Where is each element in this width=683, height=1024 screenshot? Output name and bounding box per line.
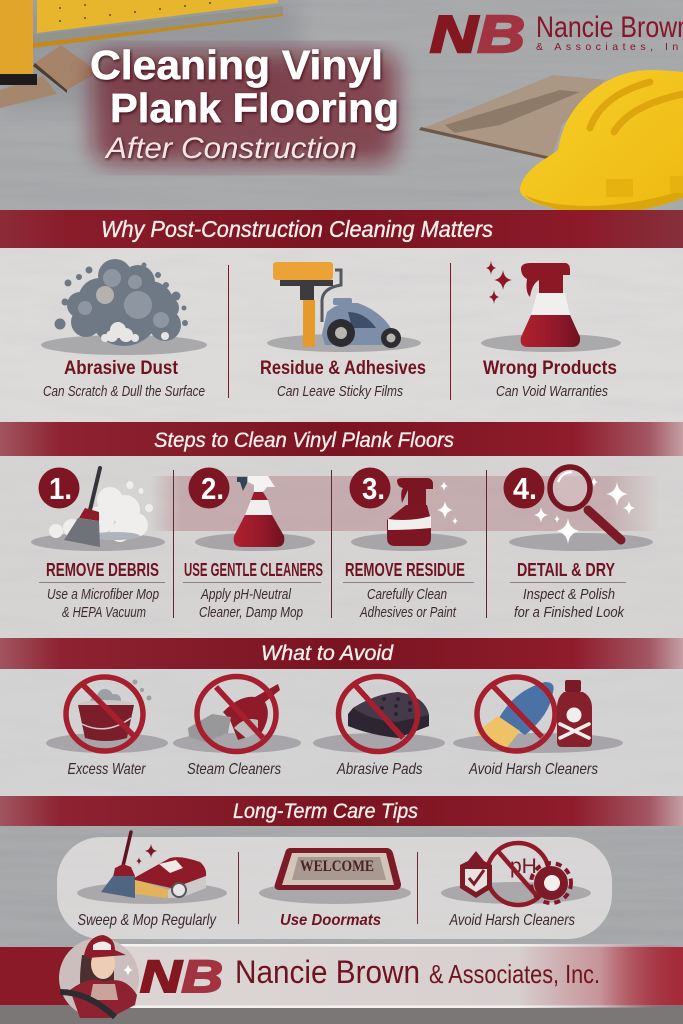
step 3: REMOVE RESIDUE [345,560,465,580]
rounded pill panel [57,837,612,939]
tip: avoid harsh cleaners: pH [510,855,537,878]
section heading band [0,210,683,248]
tip: avoid harsh cleaners [441,843,591,929]
section heading band [0,638,683,669]
icon: spray bottle [234,476,284,547]
panel background [0,248,683,422]
panel: steps [0,422,683,638]
footer pill [90,944,683,1008]
number badge 1 [38,468,80,508]
divider [228,265,229,398]
number badge 4: 4. [513,471,537,506]
avoid: harsh cleaners [453,677,623,778]
top logo [430,6,683,64]
footer logo mark NB: NB [140,951,223,1002]
item: residue and adhesives: Can Leave Sticky Films [277,383,403,400]
footer band [0,947,683,1005]
panel: long-term care tips [0,796,683,939]
label: Abrasive Pads [336,761,422,778]
item: abrasive dust [43,358,205,400]
panel: why it matters [0,210,683,422]
dividers [238,852,418,924]
title line 1: Cleaning Vinyl [90,42,383,88]
section heading band [0,796,683,826]
number badge 3: 3. [362,471,385,506]
title line 2: Plank Flooring [110,85,399,131]
icon: broom and dust [49,468,153,547]
number badge 1: 1. [49,471,72,506]
item: residue and adhesives: Residue & Adhesives [260,358,426,379]
dividers [173,470,487,618]
step 2 [183,468,323,621]
icon: spray bottle [481,261,621,352]
item: abrasive dust: Abrasive Dust [64,358,179,379]
label: Avoid Harsh Cleaners [468,761,598,778]
step 3 [343,468,474,621]
icon: abrasive dust [41,259,207,355]
footer company suffix: & Associates, Inc. [429,959,600,989]
title block [90,42,399,165]
item: abrasive dust: Can Scratch & Dull the Surface [43,383,205,400]
label: Excess Water [68,761,146,778]
number badge 3 [350,468,390,508]
step 2: Apply pH-Neutral [200,586,292,603]
step 4: Inspect & Polish [523,586,615,603]
title line 3: After Construction [104,132,357,165]
step 1 [31,468,165,621]
number badge 4 [504,468,544,508]
panel: what to avoid [0,638,683,796]
tip: doormats [259,848,411,929]
footer company name: Nancie Brown [235,954,420,990]
step 4 [504,467,653,621]
welcome text: WELCOME [300,858,374,875]
icon: poison bottle [557,680,592,747]
panel background [0,669,683,796]
item: residue and adhesives [260,358,426,400]
number badge 2: 2. [201,471,224,506]
step 1: REMOVE DEBRIS [46,560,159,580]
icon: roller and mower [267,262,421,352]
hard hat [520,70,683,214]
section heading band: Long-Term Care Tips [233,800,418,823]
avoid: steam cleaners [173,676,301,778]
avoid: abrasive pads [313,676,445,778]
section heading band: Steps to Clean Vinyl Plank Floors [154,429,454,452]
wood board [419,75,605,160]
step 1: & HEPA Vacuum [62,604,146,621]
divider [450,263,451,400]
pale red strip [150,476,660,531]
item: wrong products [483,358,617,400]
panel background [0,456,683,638]
avatar cleaner [59,935,139,1018]
step 2: Cleaner, Damp Mop [199,604,303,621]
section heading band: Why Post-Construction Cleaning Matters [101,216,493,242]
icon: magnifier [534,467,635,544]
step 3: Carefully Clean [367,586,447,603]
item: wrong products: Can Void Warranties [496,383,608,400]
section heading band [0,422,683,456]
step 2: USE GENTLE CLEANERS [184,560,323,580]
item: wrong products: Wrong Products [483,358,617,379]
label: Steam Cleaners [187,761,281,778]
step 3: Adhesives or Paint [359,604,457,621]
footer [0,935,683,1018]
logo mark NB: NB [430,6,525,64]
step 4: DETAIL & DRY [517,560,615,580]
icon: residue spray bottle [387,478,458,546]
tip: sweep and mop [77,832,227,929]
construction scaffold and wood pieces [0,0,283,108]
label: Avoid Harsh Cleaners [449,912,575,929]
step 1: Use a Microfiber Mop [47,586,159,603]
step 4: for a Finished Look [514,604,625,621]
title glow [92,52,397,164]
label: Use Doormats [280,912,381,929]
label: Sweep & Mop Regularly [78,912,217,929]
avoid: excess water [46,677,168,778]
number badge 2 [188,468,230,508]
section heading band: What to Avoid [261,642,394,665]
